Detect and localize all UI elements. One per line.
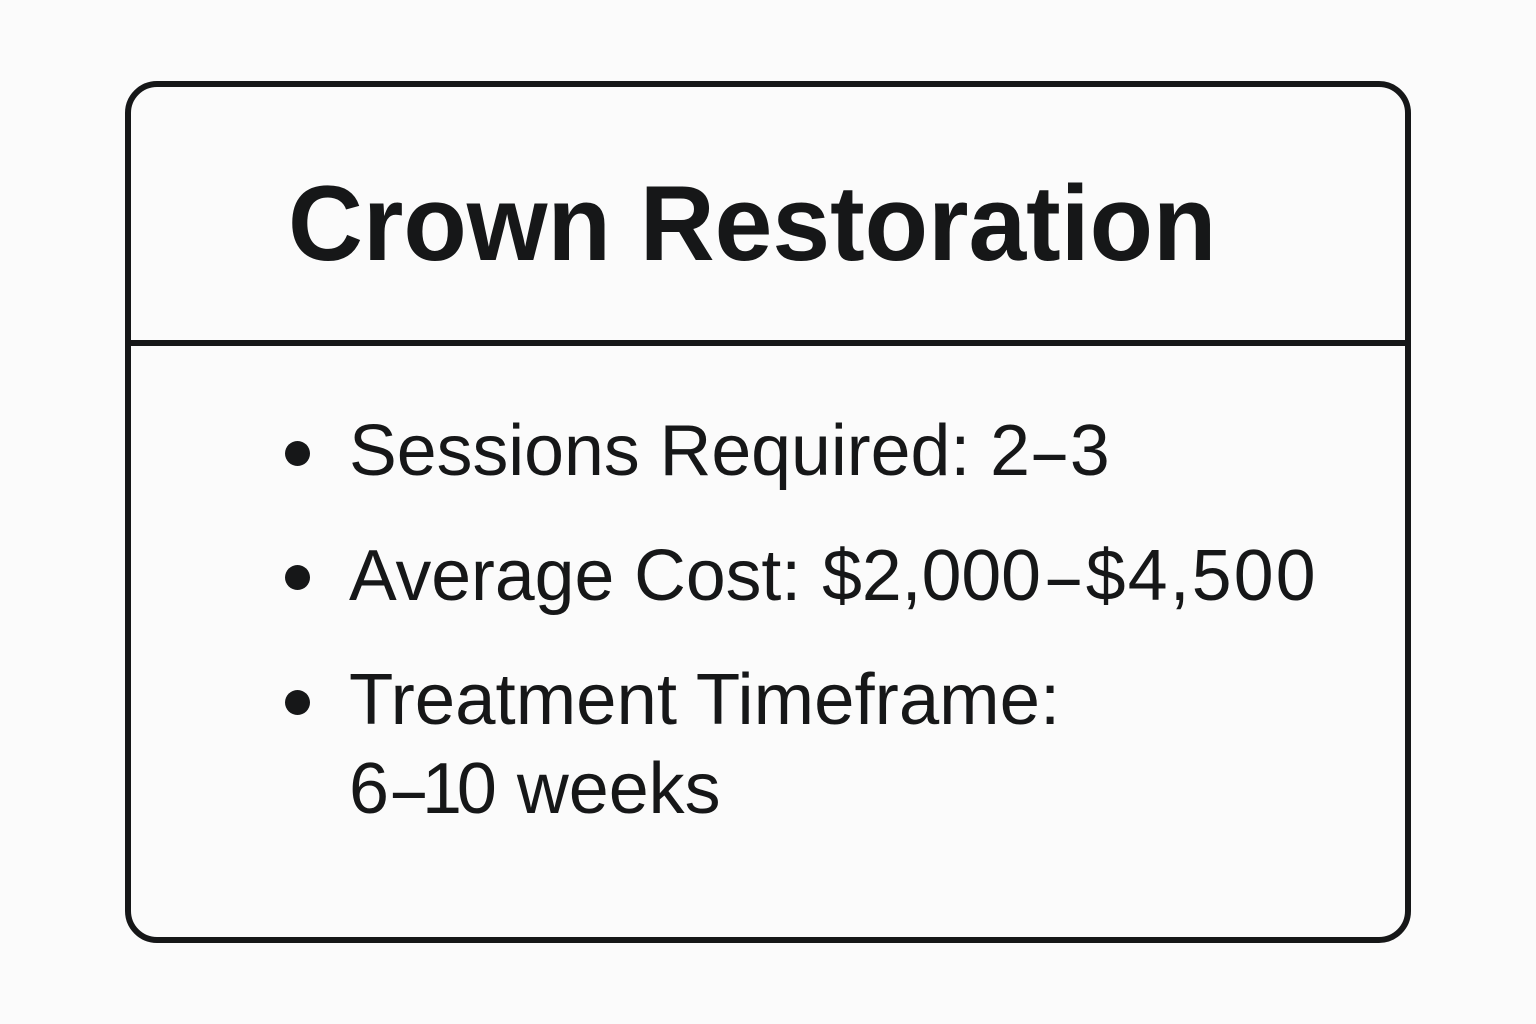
text: average cost: – xyxy=(1047,532,1079,619)
text: average cost: Average Cost: $2,000 $4,500 xyxy=(349,536,1318,616)
text: sessions required: Sessions Required: 2 3 xyxy=(349,411,1110,491)
divider line xyxy=(128,340,1408,346)
heading: Crown Restoration: Crown Restoration xyxy=(288,163,1216,283)
bullet icon: sessions xyxy=(285,441,310,466)
text: treatment timeframe: – xyxy=(393,746,425,832)
bullet icon: cost xyxy=(285,565,310,590)
text: sessions required: – xyxy=(1034,408,1066,494)
text: treatment timeframe: 6 10 weeks xyxy=(349,749,721,829)
panel: crown restoration card xyxy=(125,81,1411,943)
text: treatment timeframe: Treatment Timeframe: xyxy=(349,660,1060,740)
bullet icon: timeframe xyxy=(285,690,310,715)
bullet list xyxy=(285,408,1318,832)
text: treatment timeframe xyxy=(349,660,1060,832)
